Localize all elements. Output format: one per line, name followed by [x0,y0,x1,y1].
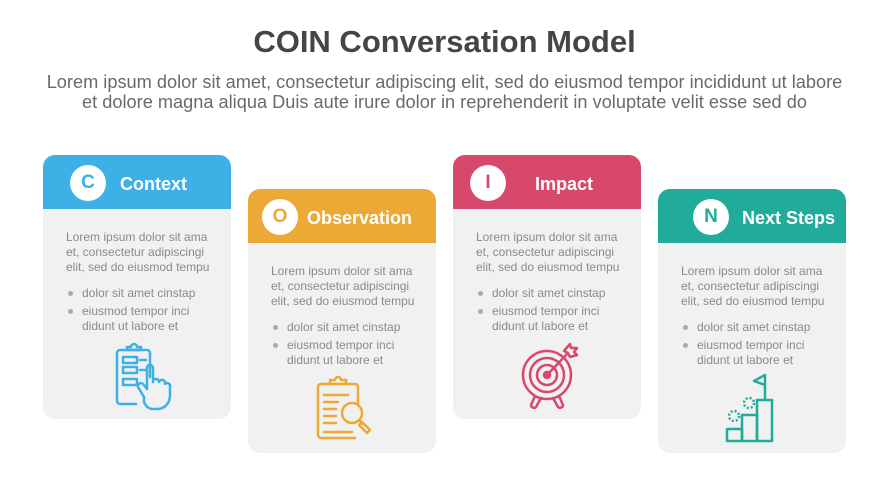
text: impact: Lorem ipsum dolor sit ama [476,230,617,244]
header: next steps [658,189,846,243]
text: observation [271,264,414,308]
icon: target [522,342,578,410]
panel: impact [453,155,641,419]
text: observation: Lorem ipsum dolor sit ama [271,264,412,278]
icon: clipboard magnifier [316,376,372,440]
bullets: context: dolor sit amet cinstap [82,286,195,300]
header: observation [248,189,436,243]
subtitle: et dolore magna aliqua Duis aute irure dolor in reprehenderit in voluptate velit esse sed do [82,92,807,112]
panel: observation [248,189,436,453]
bullets: observation: didunt ut labore et [287,353,383,367]
bullets: context: didunt ut labore et [82,319,178,333]
header: context: Context [120,174,187,194]
bullets: context [68,286,195,333]
header: impact: Impact [535,174,593,194]
bullets: next steps: eiusmod tempor inci [697,338,804,352]
bullets: impact: dolor sit amet cinstap [492,286,605,300]
icon: steps with flag [726,374,774,442]
text: context: elit, sed do eiusmod tempu [66,260,209,274]
header: context [43,155,231,209]
subtitle [47,72,842,112]
text: next steps [681,264,824,308]
bullets: next steps: didunt ut labore et [697,353,793,367]
panel: context [43,155,231,419]
bullets: context: eiusmod tempor inci [82,304,189,318]
header: observation: Observation [307,208,412,228]
text: observation: elit, sed do eiusmod tempu [271,294,414,308]
bullets: impact: didunt ut labore et [492,319,588,333]
header: impact: I [485,172,491,193]
text: observation: et, consectetur adipiscingi [271,279,409,293]
header: observation: O [273,206,287,227]
bullets: observation: eiusmod tempor inci [287,338,394,352]
header: impact [453,155,641,209]
text: impact: elit, sed do eiusmod tempu [476,260,619,274]
icon: clipboard hand [116,342,172,410]
header: next steps: Next Steps [742,208,835,228]
header: next steps: N [704,206,718,227]
bullets: impact [478,286,605,333]
text: next steps: Lorem ipsum dolor sit ama [681,264,822,278]
panel: next steps [658,189,846,453]
text: next steps: et, consectetur adipiscingi [681,279,819,293]
text: context [66,230,209,274]
text: context: Lorem ipsum dolor sit ama [66,230,207,244]
subtitle: Lorem ipsum dolor sit amet, consectetur adipiscing elit, sed do eiusmod tempor incididunt ut labore [47,72,842,92]
title: COIN Conversation Model [253,24,636,59]
bullets: next steps [683,320,810,367]
header: context: C [81,172,95,193]
bullets: next steps: dolor sit amet cinstap [697,320,810,334]
text: impact: et, consectetur adipiscingi [476,245,614,259]
bullets: observation [273,320,400,367]
text: next steps: elit, sed do eiusmod tempu [681,294,824,308]
text: context: et, consectetur adipiscingi [66,245,204,259]
bullets: observation: dolor sit amet cinstap [287,320,400,334]
bullets: impact: eiusmod tempor inci [492,304,599,318]
text: impact [476,230,619,274]
